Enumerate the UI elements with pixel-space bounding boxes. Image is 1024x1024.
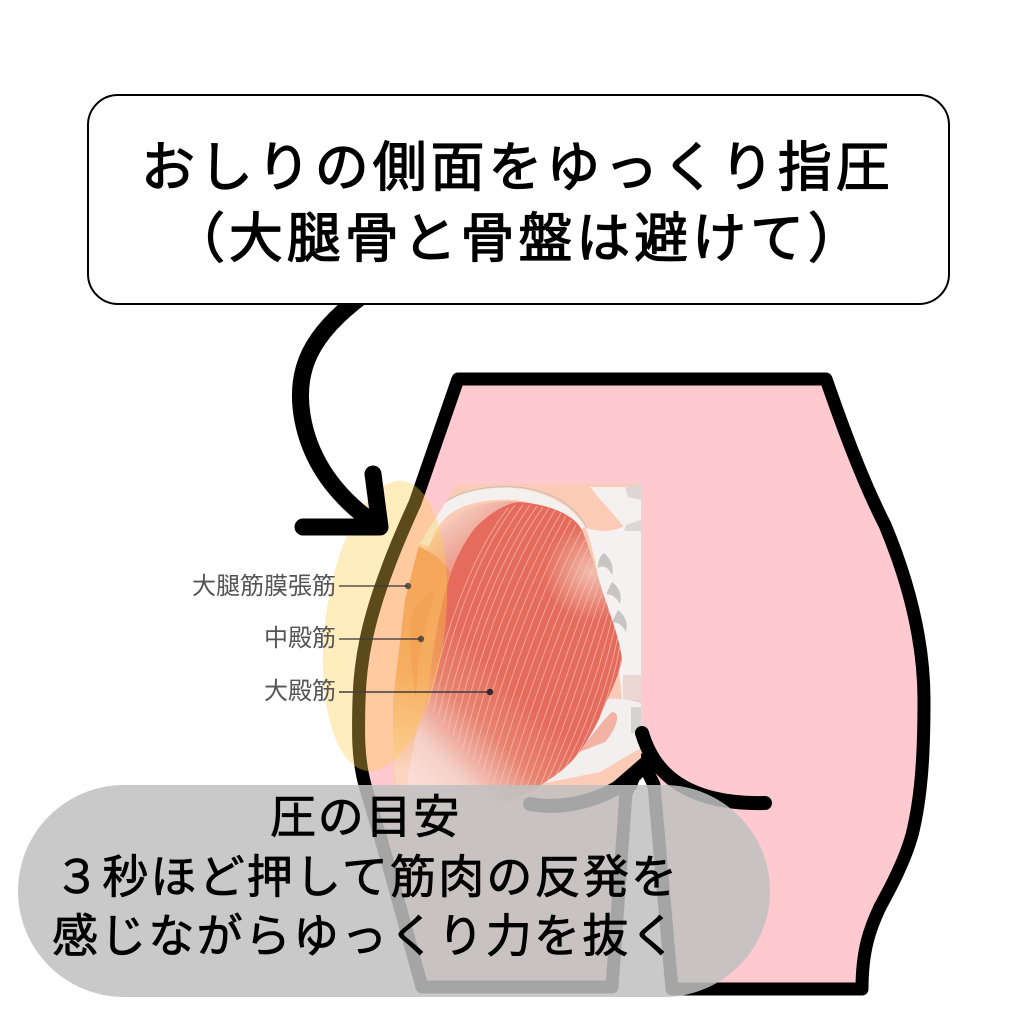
highlighted area: yellow ellipse: [308, 474, 462, 778]
body silhouette: [359, 379, 924, 989]
callout box: title: [88, 95, 949, 304]
note pill: pressure guide: [18, 785, 770, 997]
lower pelvis bone: [540, 699, 641, 784]
gluteus medius: [427, 502, 519, 578]
label: gluteus maximus: [264, 678, 493, 705]
anatomy illustration: [392, 484, 641, 816]
label: tensor fasciae latae: 大腿筋膜張筋: [192, 573, 336, 600]
sacrum bone: [586, 484, 641, 707]
note heading: 圧の目安: [270, 791, 461, 843]
label: gluteus medius: [264, 625, 424, 652]
arrow: [300, 296, 380, 527]
note line 2: 感じながらゆっくり力を抜く: [52, 910, 679, 962]
ilium rim: [424, 494, 580, 545]
title line 1: おしりの側面をゆっくり指圧: [141, 138, 894, 198]
label: tensor fasciae latae: [192, 573, 411, 600]
title line 2: （大腿骨と骨盤は避けて）: [171, 209, 866, 269]
muscle labels: [192, 573, 493, 705]
tensor fasciae latae: [392, 546, 450, 785]
note line 1: ３秒ほど押して筋肉の反発を: [54, 851, 679, 903]
label: gluteus medius: 中殿筋: [264, 625, 336, 652]
label: gluteus maximus: 大殿筋: [264, 678, 336, 705]
peach tissue background: [393, 484, 641, 816]
crease lines: [530, 733, 765, 806]
gluteus maximus: [407, 502, 622, 790]
